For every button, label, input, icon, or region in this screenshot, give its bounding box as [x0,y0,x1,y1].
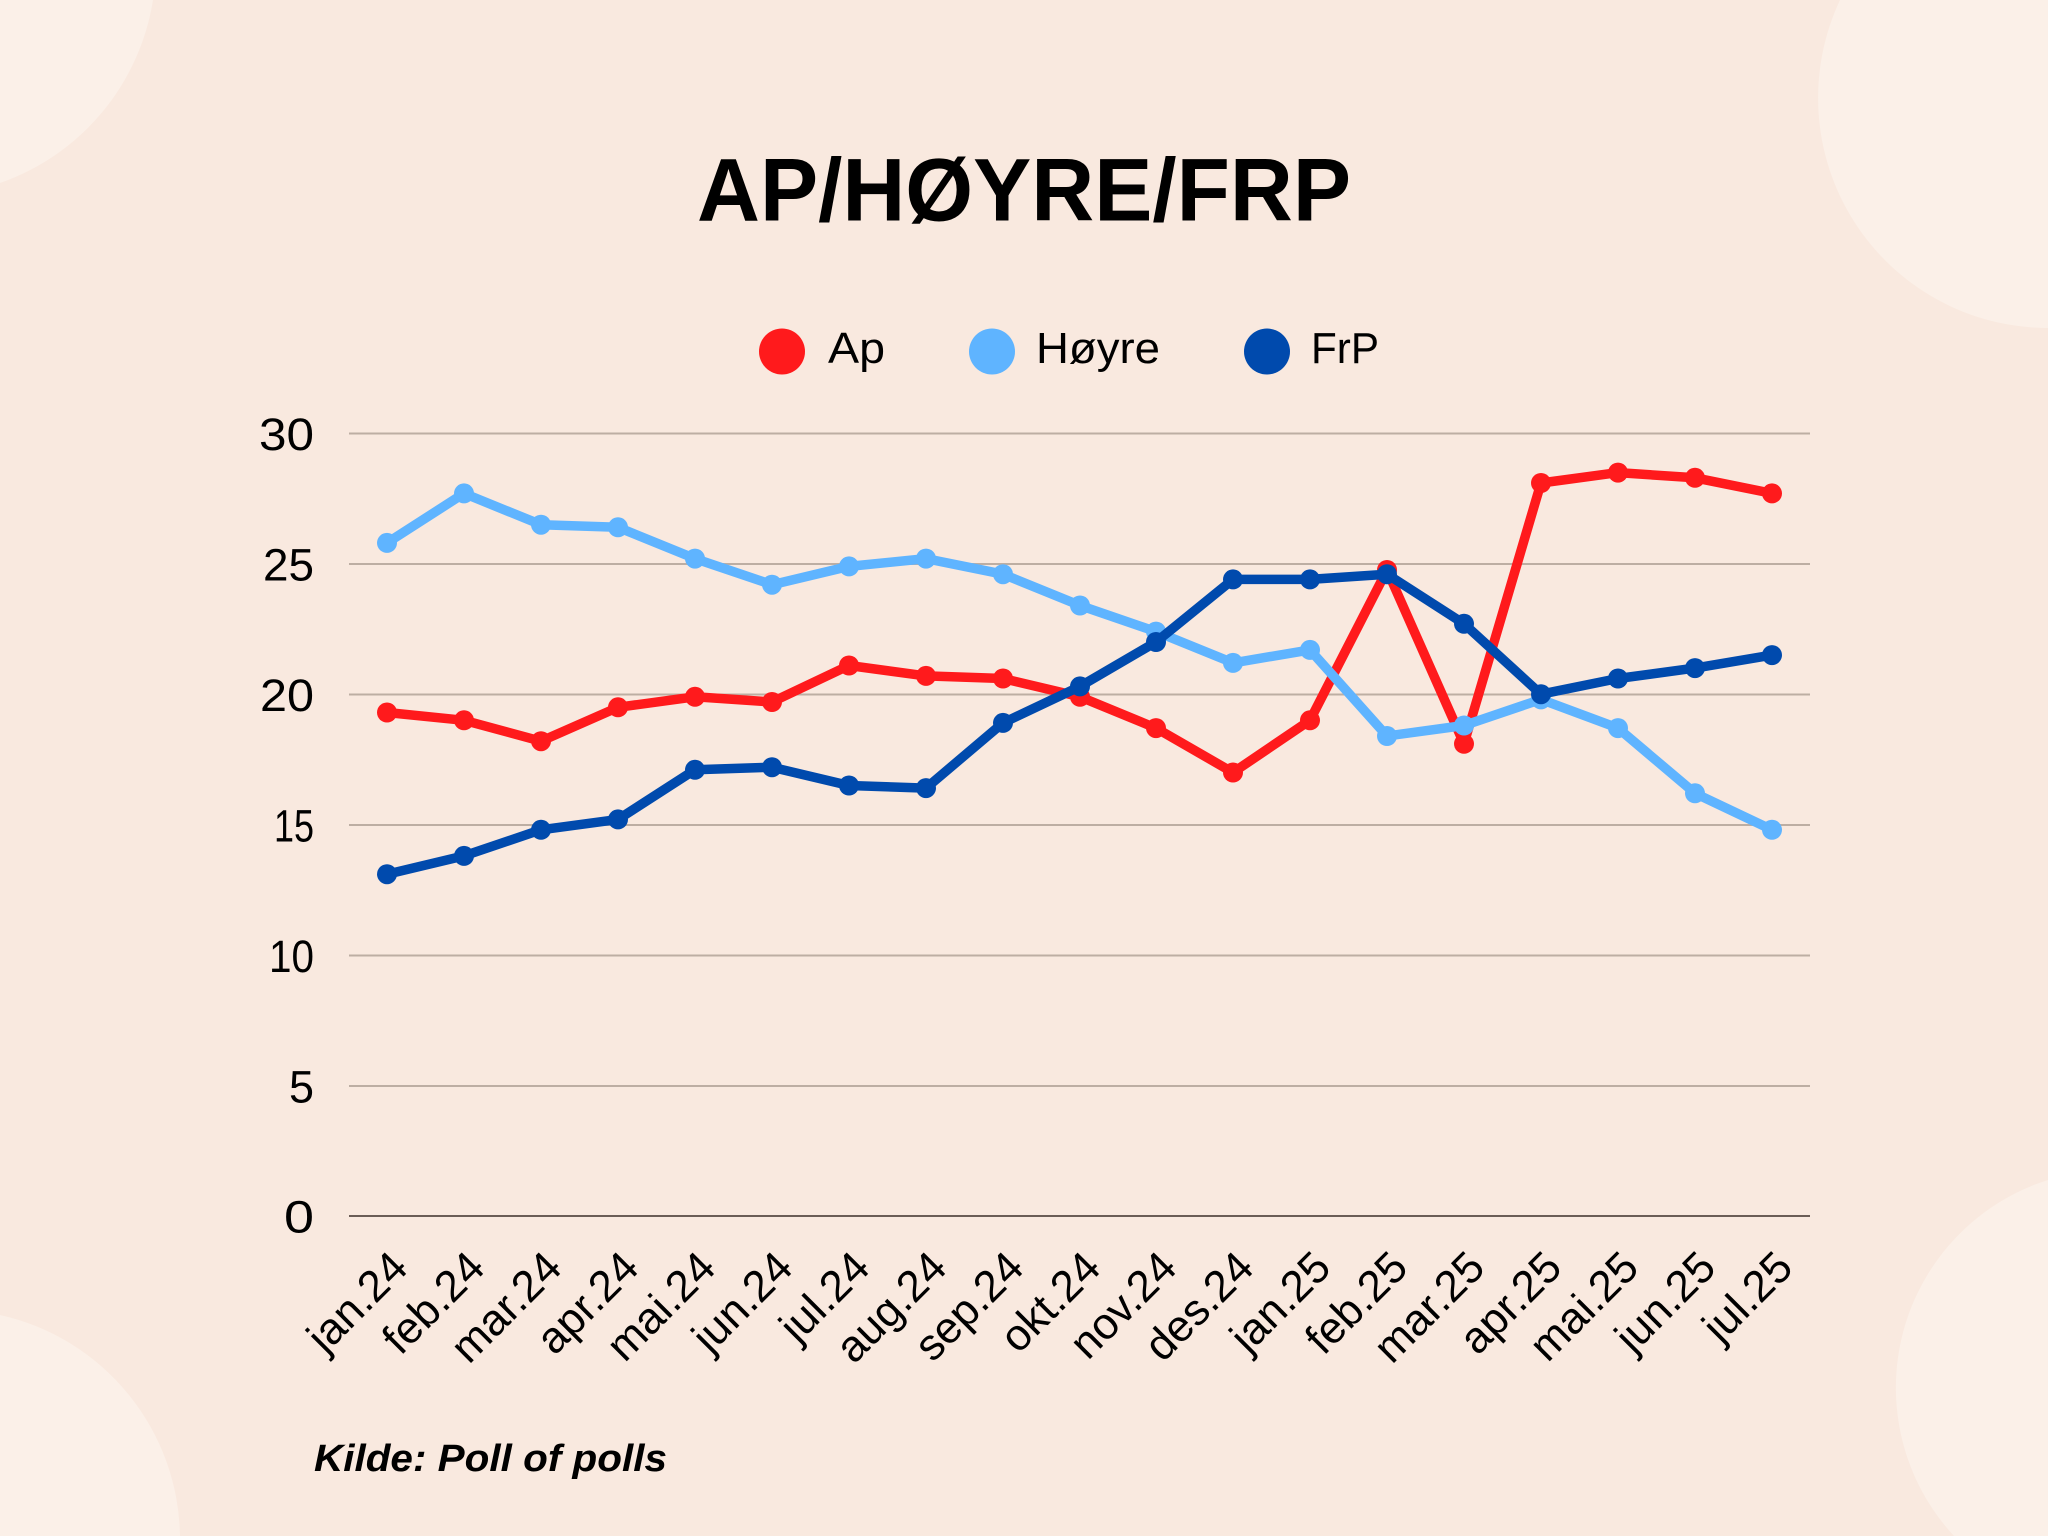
x axis labels: apr.24 [527,1242,648,1364]
legend item: FrP: FrP [1311,324,1379,373]
x axis labels: sep.24 [905,1242,1033,1370]
series: Ap [377,463,1782,782]
x axis labels: des.24 [1135,1242,1263,1370]
x axis labels: jun.24 [681,1242,802,1363]
legend item: Ap [759,324,885,374]
x axis labels [296,1242,1802,1372]
y axis labels: 30 [259,409,314,460]
line chart [259,409,1810,1372]
x axis labels: jul.24 [769,1242,879,1353]
y axis labels: 15 [274,800,314,852]
legend item: Høyre: Høyre [1036,324,1160,373]
y axis labels: 25 [263,540,314,590]
x axis labels: jan.24 [296,1242,417,1363]
x axis labels: jan.25 [1219,1242,1340,1363]
x axis labels: mar.25 [1364,1242,1494,1372]
legend item: FrP [1244,324,1379,374]
x axis labels: mai.24 [597,1242,725,1370]
y axis labels [259,409,314,1242]
x axis labels: aug.24 [826,1242,956,1372]
source note: Kilde: Poll of polls [314,1438,667,1480]
y axis labels: 10 [269,931,314,982]
series: FrP [377,564,1782,884]
y axis labels: 20 [260,670,314,721]
x axis labels: mar.24 [441,1242,571,1372]
legend item: Høyre [969,324,1160,374]
x axis labels: jun.25 [1604,1242,1725,1363]
x axis labels: feb.25 [1296,1242,1417,1364]
x axis labels: feb.24 [373,1242,494,1364]
series: Høyre [377,483,1782,840]
legend item: Ap: Ap [828,324,885,373]
y axis labels: 0 [284,1192,314,1242]
x axis labels: mai.25 [1520,1242,1648,1370]
title: AP/HØYRE/FRP [697,140,1351,240]
x axis labels: jul.25 [1692,1242,1802,1353]
x axis labels: nov.24 [1060,1242,1186,1368]
legend [759,324,1379,374]
x axis labels: apr.25 [1450,1242,1571,1364]
x axis labels: okt.24 [991,1242,1110,1362]
y axis labels: 5 [289,1062,314,1112]
